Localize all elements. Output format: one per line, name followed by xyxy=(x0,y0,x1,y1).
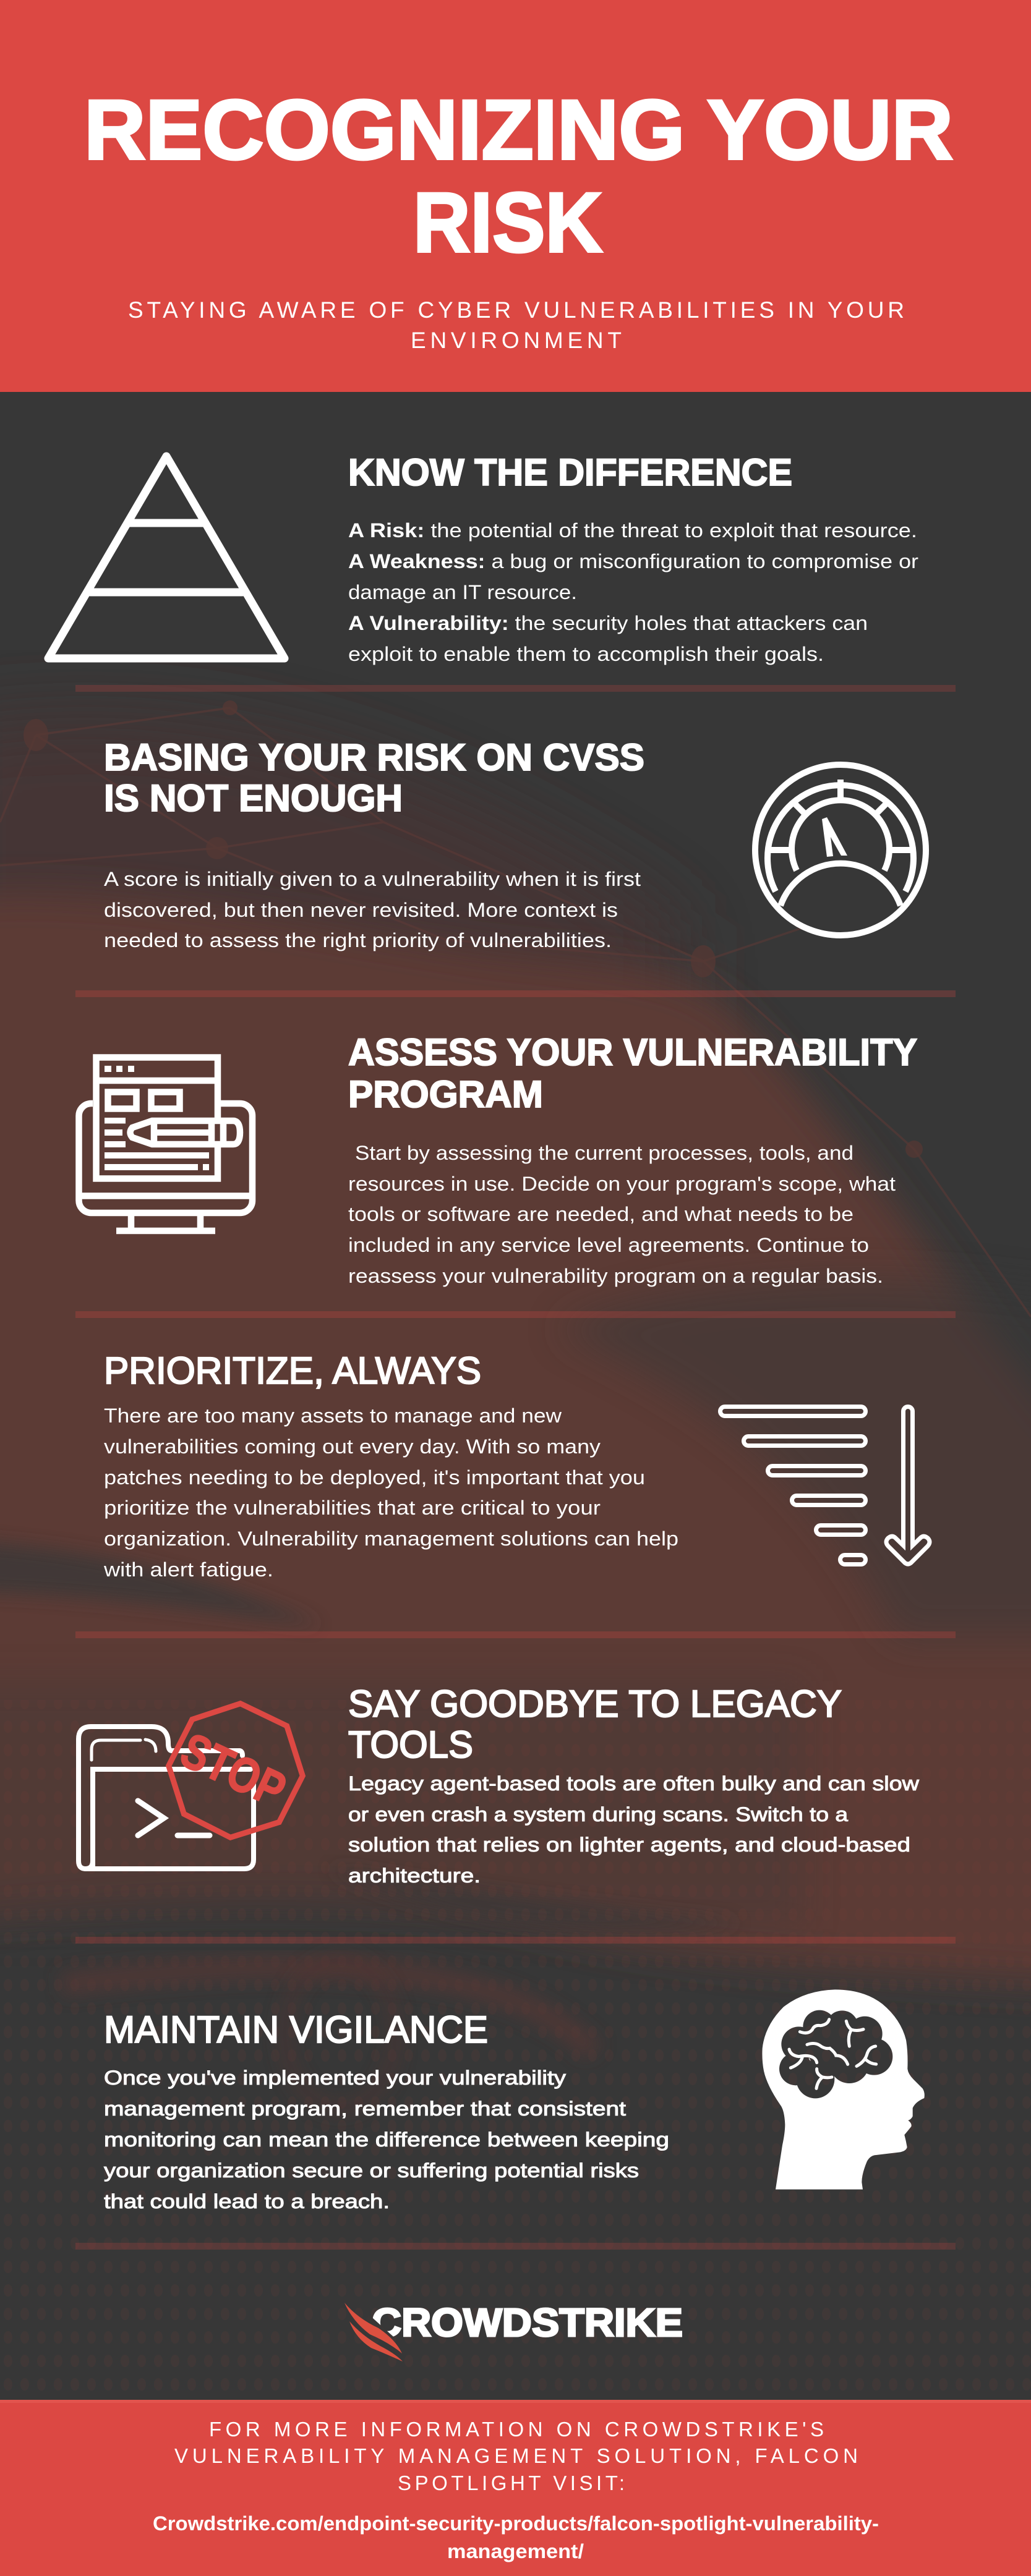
body text: with alert fatigue. xyxy=(103,1558,273,1581)
body text: patches needing to be deployed, it's important that you xyxy=(104,1466,645,1489)
definitions text: exploit to enable them to accomplish their goals. xyxy=(348,643,824,665)
heading: SAY GOODBYE TO LEGACY xyxy=(348,1683,842,1725)
icon: pyramid xyxy=(48,456,284,658)
heading: ASSESS YOUR VULNERABILITY xyxy=(348,1031,917,1073)
body text: discovered, but then never revisited. More context is xyxy=(104,899,618,921)
body text xyxy=(348,1772,920,1887)
icon: head with brain xyxy=(762,1989,925,2190)
heading: PRIORITIZE, ALWAYS xyxy=(104,1350,481,1392)
body text: reassess your vulnerability program on a regular basis. xyxy=(348,1265,883,1287)
heading: MAINTAIN VIGILANCE xyxy=(104,2009,488,2051)
definitions text: A Risk: the potential of the threat to exploit that resource. xyxy=(348,519,917,542)
body text: A score is initially given to a vulnerability when it is first xyxy=(104,868,641,890)
panel: prioritize xyxy=(103,1350,930,1581)
definitions text: A Weakness: a bug or misconfiguration to compromise or xyxy=(348,550,918,572)
subtitle: STAYING AWARE OF CYBER VULNERABILITIES IN YOUR xyxy=(128,297,904,323)
heading xyxy=(104,736,644,819)
heading xyxy=(348,1683,842,1766)
call to action text: VULNERABILITY MANAGEMENT SOLUTION, FALCON xyxy=(174,2444,858,2467)
body text: architecture. xyxy=(348,1864,481,1887)
definitions text: A Vulnerability: the security holes that attackers can xyxy=(348,612,868,634)
icon: monitor with document and pencil xyxy=(79,1057,252,1231)
body text xyxy=(104,868,641,951)
panel: CVSS xyxy=(104,736,926,951)
header band xyxy=(0,0,1031,392)
panel: maintain vigilance xyxy=(104,1989,925,2213)
logo: CrowdStrike xyxy=(344,2300,683,2361)
body text: Once you've implemented your vulnerability xyxy=(104,2067,566,2089)
body text: prioritize the vulnerabilities that are critical to your xyxy=(104,1497,601,1519)
panel: know the difference xyxy=(48,451,918,665)
url: management/ xyxy=(447,2540,584,2562)
heading: KNOW THE DIFFERENCE xyxy=(348,451,792,493)
body text: included in any service level agreements. Continue to xyxy=(348,1234,869,1256)
icon: stop sign: STOP xyxy=(173,1722,294,1818)
body text: tools or software are needed, and what needs to be xyxy=(348,1203,853,1225)
body text xyxy=(348,1142,896,1287)
call to action text: SPOTLIGHT VISIT: xyxy=(398,2472,625,2494)
body text: that could lead to a breach. xyxy=(104,2190,390,2213)
body text: monitoring can mean the difference between keeping xyxy=(104,2128,669,2151)
heading: BASING YOUR RISK ON CVSS xyxy=(104,736,644,778)
title xyxy=(84,83,953,270)
title: RECOGNIZING YOUR xyxy=(84,83,953,177)
subtitle: ENVIRONMENT xyxy=(411,328,622,353)
icon: gauge xyxy=(755,765,926,935)
subtitle xyxy=(128,297,904,353)
body text: management program, remember that consistent xyxy=(104,2098,626,2120)
body text: Start by assessing the current processes, tools, and xyxy=(355,1142,853,1164)
body text: organization. Vulnerability management solutions can help xyxy=(104,1528,678,1550)
panel: assess program xyxy=(79,1031,917,1287)
body text: vulnerabilities coming out every day. With so many xyxy=(104,1435,601,1458)
heading: IS NOT ENOUGH xyxy=(104,777,403,819)
panel: legacy tools xyxy=(79,1683,920,1887)
call to action text xyxy=(174,2418,858,2494)
body text xyxy=(103,1405,678,1581)
logo: CrowdStrike: CROWDSTRIKE xyxy=(372,2300,683,2345)
dark textured background xyxy=(0,392,1031,2400)
footer band xyxy=(0,2400,1031,2576)
heading xyxy=(348,1031,917,1115)
body text: There are too many assets to manage and new xyxy=(104,1405,562,1427)
title: RISK xyxy=(413,176,602,270)
body text: your organization secure or suffering potential risks xyxy=(104,2159,639,2182)
body text: Legacy agent-based tools are often bulky and can slow xyxy=(348,1772,920,1795)
body text: resources in use. Decide on your program's scope, what xyxy=(348,1173,896,1195)
url: Crowdstrike.com/endpoint-security-products/falcon-spotlight-vulnerability- xyxy=(153,2512,879,2535)
call to action text: FOR MORE INFORMATION ON CROWDSTRIKE'S xyxy=(209,2418,824,2441)
icon: descending bars and arrow xyxy=(720,1407,930,1564)
body text: solution that relies on lighter agents, and cloud-based xyxy=(348,1834,910,1856)
body text: or even crash a system during scans. Switch to a xyxy=(348,1803,848,1826)
url xyxy=(153,2512,879,2562)
definitions text xyxy=(348,519,918,665)
icon: terminal window with stop sign xyxy=(79,1704,302,1869)
definitions text: damage an IT resource. xyxy=(348,581,577,603)
body text xyxy=(104,2067,669,2213)
heading: PROGRAM xyxy=(348,1073,543,1115)
heading: TOOLS xyxy=(348,1724,473,1766)
body text: needed to assess the right priority of vulnerabilities. xyxy=(104,929,612,951)
